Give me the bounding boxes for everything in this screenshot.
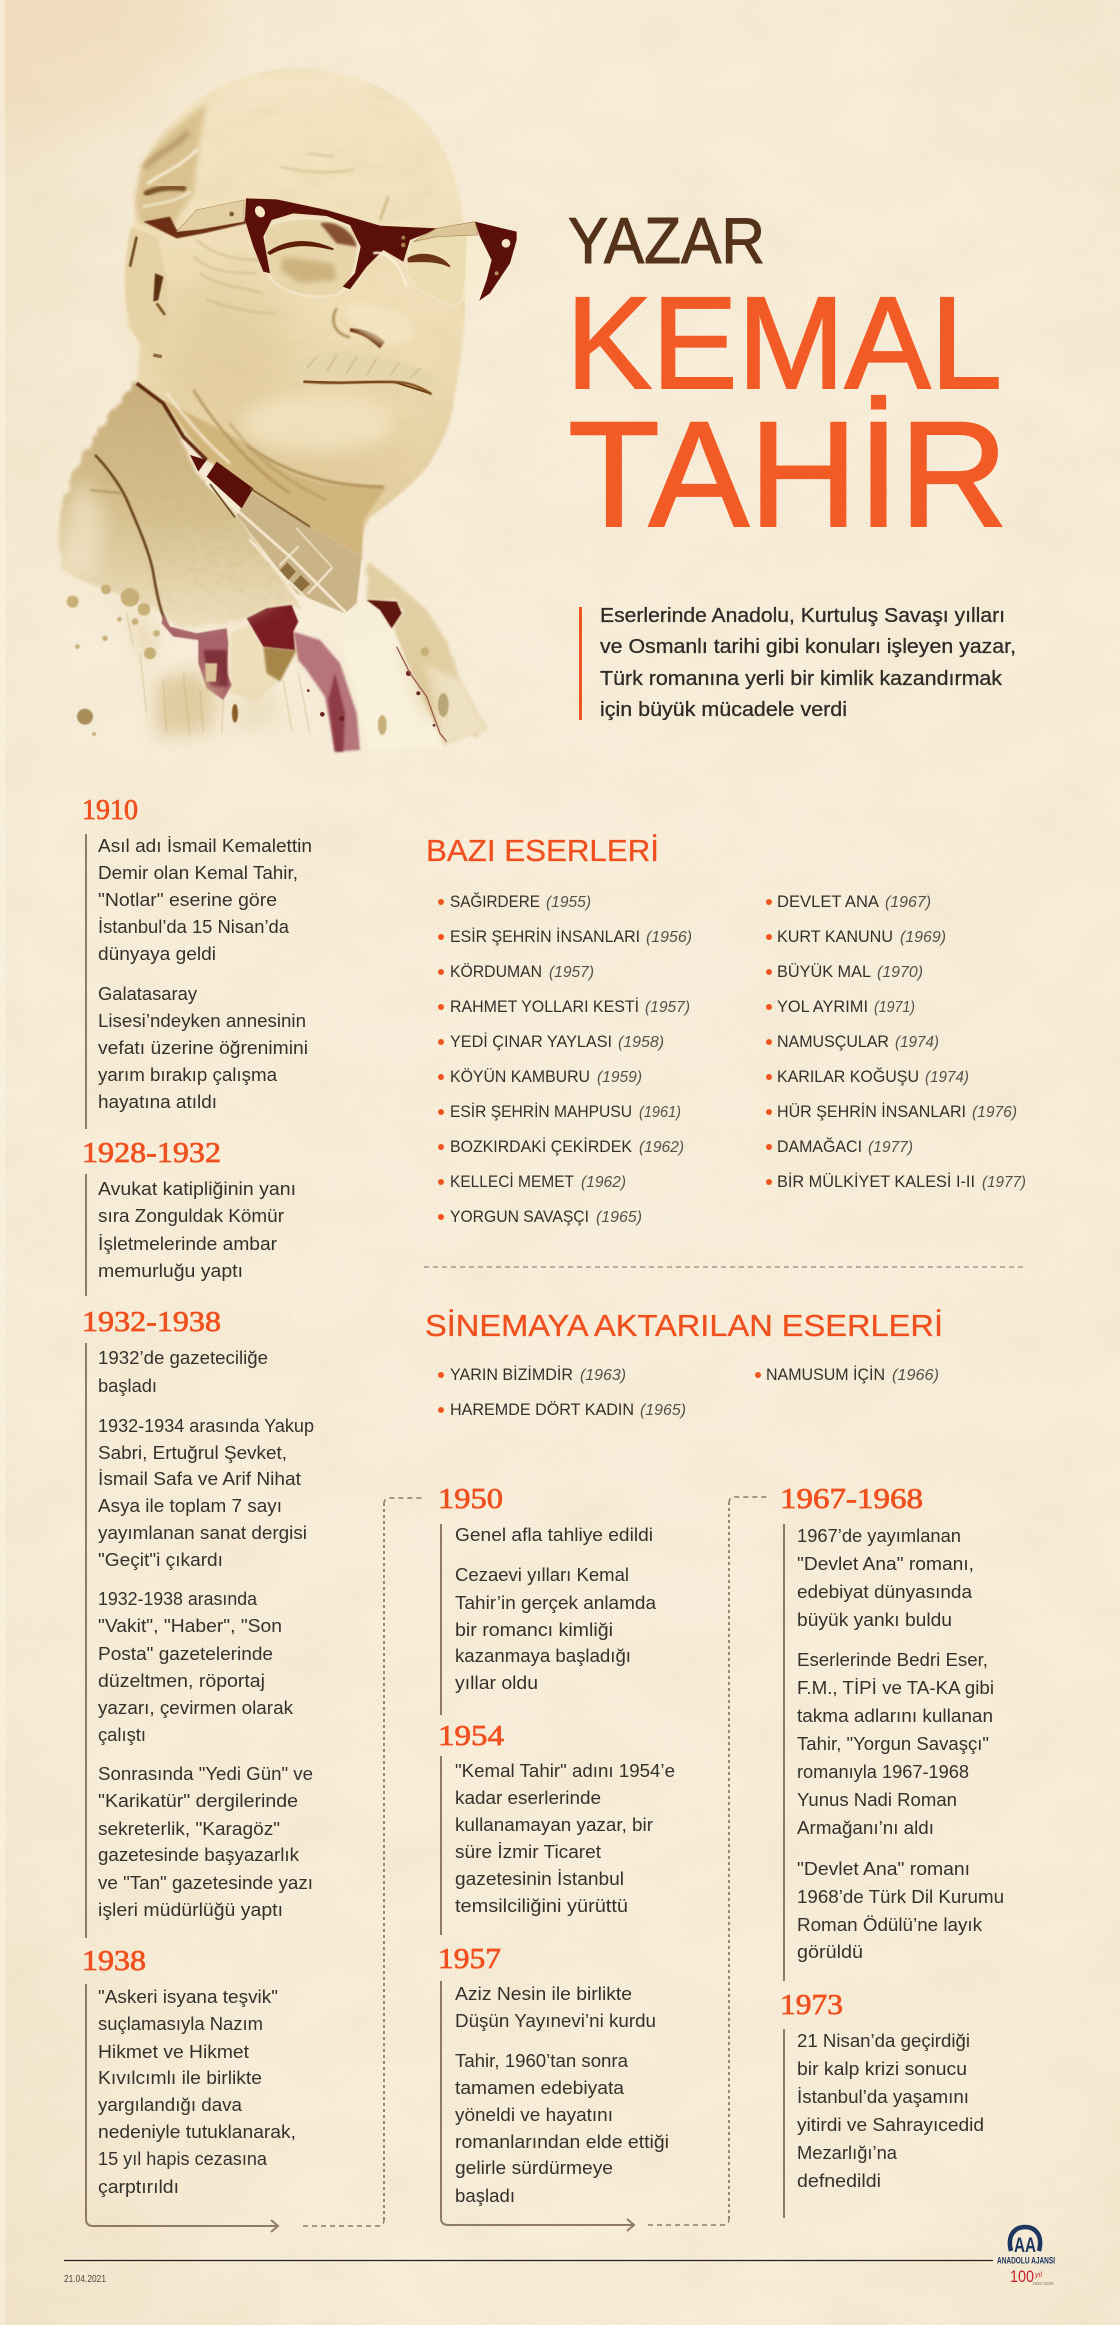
entry: 1950: Cezaevi yılları Kemal xyxy=(455,1564,629,1585)
entry: 1932-1938: ve "Tan" gazetesinde yazı xyxy=(98,1872,313,1893)
list: works column 2 xyxy=(766,892,1026,1191)
entry: 1957: 1957 xyxy=(438,1943,501,1975)
entry: 1932-1938: Posta" gazetelerinde xyxy=(98,1643,273,1664)
entry: 1932-1938: Asya ile toplam 7 sayı xyxy=(98,1495,282,1516)
list: works column 1: ESİR ŞEHRİN MAHPUSU xyxy=(450,1102,632,1121)
nose xyxy=(333,308,350,337)
entry: 1938 xyxy=(82,1945,296,2197)
list: works column 1: RAHMET YOLLARI KESTİ xyxy=(450,997,639,1016)
entry: 1967-1968: 1968’de Türk Dil Kurumu xyxy=(797,1886,1004,1907)
hair xyxy=(135,103,207,230)
lower portrait: jacket, collar and tie xyxy=(58,382,487,752)
entry: 1932-1938: Sonrasında "Yedi Gün" ve xyxy=(98,1763,313,1784)
list: works column 2: (1974) xyxy=(895,1034,939,1051)
list: works column 1: (1962) xyxy=(581,1174,626,1191)
entry: 1938: yargılandığı dava xyxy=(98,2094,243,2115)
list: film adaptations xyxy=(438,1365,939,1419)
entry: 1954: "Kemal Tahir" adını 1954’e xyxy=(455,1760,675,1781)
list: works column 2: KARILAR KOĞUŞU xyxy=(777,1067,919,1086)
entry: 1957: romanlarından elde ettiği xyxy=(455,2131,669,2152)
entry: 1967-1968 xyxy=(780,1483,1004,1981)
entry: 1938: 15 yıl hapis cezasına xyxy=(98,2148,268,2169)
list: works column 2: DAMAĞACI xyxy=(777,1137,862,1156)
tie and burgundy stains xyxy=(230,625,277,700)
icon: Anadolu Ajansı logo: ANADOLU AJANSI xyxy=(997,2256,1055,2266)
glasses: dark frame xyxy=(245,198,437,289)
intro text with vertical bar: Türk romanına yerli bir kimlik kazandırmak xyxy=(600,668,1003,690)
entry: 1957: başladı xyxy=(455,2185,515,2206)
wrinkles xyxy=(193,153,353,313)
list: works column 2: HÜR ŞEHRİN İNSANLARI xyxy=(777,1102,966,1121)
entry: 1910: İstanbul’da 15 Nisan’da xyxy=(98,916,290,937)
head xyxy=(125,68,467,560)
ear xyxy=(125,227,168,357)
entry: 1967-1968: Roman Ödülü’ne layık xyxy=(797,1914,983,1935)
list: works column 2: (1970) xyxy=(877,964,923,981)
temple of glasses xyxy=(177,200,244,232)
list: works column 2: DEVLET ANA xyxy=(777,892,880,911)
list: works column 1: ESİR ŞEHRİN İNSANLARI xyxy=(450,927,640,946)
entry: 1973: İstanbul’da yaşamını xyxy=(797,2086,969,2107)
entry: 1932-1938: 1932’de gazeteciliğe xyxy=(98,1347,268,1368)
entry: 1967-1968: Eserlerinde Bedri Eser, xyxy=(797,1649,988,1670)
entry: 1932-1938: düzeltmen, röportaj xyxy=(98,1670,265,1691)
intro text with vertical bar: ve Osmanlı tarihi gibi konuları işleyen yazar, xyxy=(600,636,1016,658)
list: works column 1: YEDİ ÇINAR YAYLASI xyxy=(450,1032,612,1051)
list: works column 2: (1977) xyxy=(982,1174,1026,1191)
entry: 1954: kullanamayan yazar, bir xyxy=(455,1814,653,1835)
entry: 1932-1938: "Vakit", "Haber", "Son xyxy=(98,1615,282,1636)
entry: 1967-1968: görüldü xyxy=(797,1941,863,1962)
list: works column 1 xyxy=(438,892,692,1226)
list: works column 1: (1959) xyxy=(597,1069,642,1086)
heading: SİNEMAYA AKTARILAN ESERLERİ: SİNEMAYA AKTARILAN ESERLERİ xyxy=(425,1308,943,1343)
eyes xyxy=(268,242,333,254)
entry: 1967-1968: romanıyla 1967-1968 xyxy=(797,1761,969,1782)
list: works column 1: (1955) xyxy=(546,894,591,911)
entry: 1957 xyxy=(438,1943,669,2206)
entry: 1910: Lisesi’ndeyken annesinin xyxy=(98,1010,306,1031)
entry: 1973: 1973 xyxy=(780,1989,843,2021)
entry: 1932-1938: işleri müdürlüğü yaptı xyxy=(98,1899,283,1920)
entry: 1967-1968: Armağanı’nı aldı xyxy=(797,1817,934,1838)
entry: 1932-1938: başladı xyxy=(98,1375,157,1396)
list: works column 1: KÖYÜN KAMBURU xyxy=(450,1067,590,1086)
title: KEMAL: KEMAL xyxy=(566,269,1002,416)
entry: 1938: Kıvılcımlı ile birlikte xyxy=(98,2067,262,2088)
entry: 1932-1938: 1932-1934 arasında Yakup xyxy=(98,1415,314,1436)
entry: 1910: "Notlar" eserine göre xyxy=(98,889,277,910)
entry: 1967-1968: Tahir, "Yorgun Savaşçı" xyxy=(797,1733,989,1754)
entry: 1973 xyxy=(780,1989,984,2218)
list: works column 2: YOL AYRIMI xyxy=(777,997,868,1016)
icon: Anadolu Ajansı logo: yıl xyxy=(1034,2272,1042,2279)
entry: 1932-1938: 1932-1938 xyxy=(82,1306,221,1338)
entry: 1954: temsilciliğini yürüttü xyxy=(455,1895,628,1916)
list: works column 2: (1974) xyxy=(925,1069,969,1086)
entry: 1928-1932: İşletmelerinde ambar xyxy=(98,1233,277,1254)
watercolour washes xyxy=(130,587,440,737)
entry: 1932-1938: yayımlanan sanat dergisi xyxy=(98,1522,307,1543)
entry: 1928-1932: sıra Zonguldak Kömür xyxy=(98,1205,284,1226)
entry: 1910: Galatasaray xyxy=(98,983,198,1004)
entry: 1932-1938: yazarı, çevirmen olarak xyxy=(98,1697,294,1718)
list: works column 2: BÜYÜK MAL xyxy=(777,962,871,981)
entry: 1932-1938: sekreterlik, "Karagöz" xyxy=(98,1818,280,1839)
list: works column 1: YORGUN SAVAŞÇI xyxy=(450,1207,589,1226)
intro text with vertical bar: Eserlerinde Anadolu, Kurtuluş Savaşı yılları xyxy=(600,605,1005,627)
list: works column 2: BİR MÜLKİYET KALESİ I-II xyxy=(777,1172,975,1191)
list: works column 1: KÖRDUMAN xyxy=(450,962,542,981)
list: works column 2: KURT KANUNU xyxy=(777,927,893,946)
entry: 1950: kazanmaya başladığı xyxy=(455,1645,631,1666)
entry: 1967-1968: takma adlarını kullanan xyxy=(797,1705,993,1726)
entry: 1910: dünyaya geldi xyxy=(98,943,216,964)
entry: 1910: Asıl adı İsmail Kemalettin xyxy=(98,835,312,856)
entry: 1954: süre İzmir Ticaret xyxy=(455,1841,601,1862)
list: works column 1: (1961) xyxy=(639,1104,681,1121)
entry: 1950: Genel afla tahliye edildi xyxy=(455,1524,653,1545)
face details xyxy=(125,103,517,394)
entry: 1957: yöneldi ve hayatını xyxy=(455,2104,613,2125)
icon: Anadolu Ajansı logo: 1920-2020 xyxy=(1032,2281,1054,2286)
entry: 1932-1938: İsmail Safa ve Arif Nihat xyxy=(98,1468,301,1489)
icon: Anadolu Ajansı logo: 100 xyxy=(1010,2267,1034,2286)
entry: 1967-1968: "Devlet Ana" romanı xyxy=(797,1858,970,1879)
entry: 1973: bir kalp krizi sonucu xyxy=(797,2058,967,2079)
intro text with vertical bar: için büyük mücadele verdi xyxy=(600,699,847,721)
entry: 1957: Aziz Nesin ile birlikte xyxy=(455,1983,632,2004)
entry: 1967-1968: "Devlet Ana" romanı, xyxy=(797,1553,974,1574)
intro text with vertical bar xyxy=(579,605,1016,721)
entry: 1950: yıllar oldu xyxy=(455,1672,538,1693)
entry: 1928-1932: Avukat katipliğinin yanı xyxy=(98,1178,296,1199)
arrow: timeline column 1 to column 2 xyxy=(86,1498,423,2232)
dark collar strip xyxy=(137,383,207,460)
entry: 1967-1968: 1967-1968 xyxy=(780,1483,923,1515)
entry: 1973: yitirdi ve Sahrayıcedid xyxy=(797,2114,984,2135)
title: TAHİR: TAHİR xyxy=(568,390,1008,558)
footer rule and date: 21.04.2021 xyxy=(64,2273,106,2285)
paint splatter xyxy=(67,584,449,736)
title block xyxy=(566,204,1008,558)
list: film adaptations: YARIN BİZİMDİR xyxy=(450,1365,573,1384)
timeline column 2 xyxy=(438,1483,675,2206)
entry: 1928-1932 xyxy=(82,1137,296,1296)
plaid shirt collar xyxy=(237,492,362,613)
neck under chin xyxy=(163,400,387,557)
entry: 1928-1932: 1928-1932 xyxy=(82,1137,221,1169)
entry: 1950: 1950 xyxy=(438,1483,503,1515)
entry: 1910 xyxy=(82,794,312,1129)
entry: 1950: Tahir’in gerçek anlamda xyxy=(455,1592,657,1613)
entry: 1954 xyxy=(438,1720,675,1935)
list: works column 2: (1976) xyxy=(972,1104,1017,1121)
list: works column 1: (1957) xyxy=(549,964,594,981)
entry: 1938: çarptırıldı xyxy=(98,2176,179,2197)
icon: Anadolu Ajansı logo xyxy=(997,2227,1055,2286)
list: film adaptations: NAMUSUM İÇİN xyxy=(766,1365,885,1384)
list: works column 2: (1971) xyxy=(874,999,915,1016)
title: YAZAR: YAZAR xyxy=(568,204,765,277)
entry: 1967-1968: 1967’de yayımlanan xyxy=(797,1525,961,1546)
list: works column 1: (1956) xyxy=(646,929,692,946)
entry: 1957: tamamen edebiyata xyxy=(455,2077,625,2098)
chin and jaw shading xyxy=(247,445,383,487)
entry: 1967-1968: Yunus Nadi Roman xyxy=(797,1789,957,1810)
entry: 1932-1938: Sabri, Ertuğrul Şevket, xyxy=(98,1442,287,1463)
entry: 1957: Tahir, 1960’tan sonra xyxy=(455,2050,629,2071)
mouth xyxy=(304,382,432,394)
entry: 1950: bir romancı kimliği xyxy=(455,1619,613,1640)
entry: 1967-1968: büyük yankı buldu xyxy=(797,1609,952,1630)
list: works column 2: NAMUSÇULAR xyxy=(777,1032,889,1051)
list: film adaptations: HAREMDE DÖRT KADIN xyxy=(450,1400,634,1419)
entry: 1954: kadar eserlerinde xyxy=(455,1787,601,1808)
list: works column 2: (1967) xyxy=(885,894,931,911)
list: works column 1: (1957) xyxy=(645,999,690,1016)
entry: 1910: 1910 xyxy=(82,794,138,826)
entry: 1973: Mezarlığı’na xyxy=(797,2142,898,2163)
arrow: timeline column 2 to column 3 xyxy=(441,1497,768,2231)
entry: 1954: 1954 xyxy=(438,1720,505,1752)
entry: 1938: suçlamasıyla Nazım xyxy=(98,2013,263,2034)
list: works column 1: (1958) xyxy=(618,1034,664,1051)
entry: 1910: vefatı üzerine öğrenimini xyxy=(98,1037,308,1058)
entry: 1932-1938: gazetesinde başyazarlık xyxy=(98,1844,300,1865)
list: works column 1: SAĞIRDERE xyxy=(450,892,540,911)
panel: sinemaya aktarılan eserleri xyxy=(425,1308,943,1419)
list: film adaptations: (1963) xyxy=(580,1367,626,1384)
entry: 1932-1938: "Karikatür" dergilerinde xyxy=(98,1790,298,1811)
entry: 1932-1938: "Geçit"i çıkardı xyxy=(98,1549,223,1570)
entry: 1938: Hikmet ve Hikmet xyxy=(98,2041,249,2062)
entry: 1967-1968: edebiyat dünyasında xyxy=(797,1581,973,1602)
entry: 1954: gazetesinin İstanbul xyxy=(455,1868,624,1889)
entry: 1938: nedeniyle tutuklanarak, xyxy=(98,2121,296,2142)
entry: 1973: 21 Nisan’da geçirdiği xyxy=(797,2030,970,2051)
list: works column 2: (1977) xyxy=(868,1139,913,1156)
entry: 1932-1938: 1932-1938 arasında xyxy=(98,1588,258,1609)
entry: 1967-1968: F.M., TİPİ ve TA-KA gibi xyxy=(797,1677,994,1698)
portrait: sepia illustration of Kemal Tahir xyxy=(58,68,517,752)
entry: 1928-1932: memurluğu yaptı xyxy=(98,1260,243,1281)
entry: 1957: gelirle sürdürmeye xyxy=(455,2157,613,2178)
entry: 1938: "Askeri isyana teşvik" xyxy=(98,1986,278,2007)
timeline column 3 xyxy=(780,1483,1004,2218)
heading: BAZI ESERLERİ: BAZI ESERLERİ xyxy=(426,833,659,868)
entry: 1932-1938: çalıştı xyxy=(98,1724,146,1745)
entry: 1957: Düşün Yayınevi’ni kurdu xyxy=(455,2010,656,2031)
list: film adaptations: (1966) xyxy=(892,1367,939,1384)
entry: 1932-1938 xyxy=(82,1306,314,1938)
entry: 1938: 1938 xyxy=(82,1945,146,1977)
list: works column 1: KELLECİ MEMET xyxy=(450,1172,574,1191)
entry: 1950 xyxy=(438,1483,657,1715)
list: works column 1: BOZKIRDAKİ ÇEKİRDEK xyxy=(450,1137,633,1156)
timeline column 1 xyxy=(82,794,314,2197)
panel: bazı eserleri xyxy=(426,833,1026,1226)
entry: 1910: yarım bırakıp çalışma xyxy=(98,1064,278,1085)
entry: 1910: Demir olan Kemal Tahir, xyxy=(98,862,298,883)
entry: 1910: hayatına atıldı xyxy=(98,1091,217,1112)
list: film adaptations: (1965) xyxy=(640,1402,686,1419)
glasses: lens interiors xyxy=(263,218,358,297)
entry: 1973: defnedildi xyxy=(797,2170,881,2191)
icon: Anadolu Ajansı logo: AA xyxy=(1014,2234,1036,2257)
list: works column 1: (1962) xyxy=(639,1139,684,1156)
list: works column 1: (1965) xyxy=(596,1209,642,1226)
moustache xyxy=(288,351,442,388)
list: works column 2: (1969) xyxy=(900,929,946,946)
